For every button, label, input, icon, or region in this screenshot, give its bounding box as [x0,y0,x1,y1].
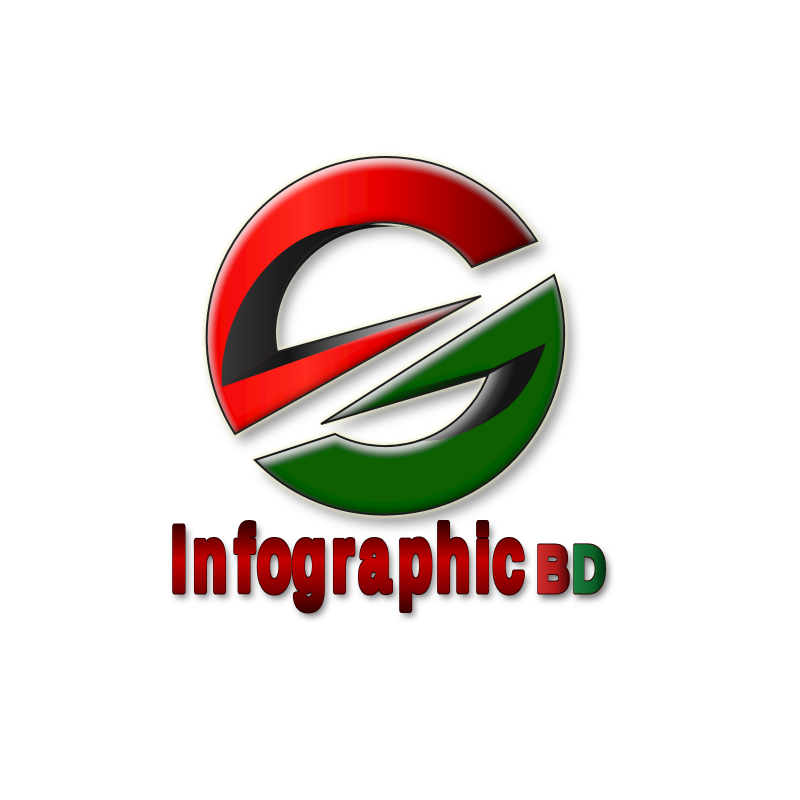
black crescent in red arc [222,224,430,387]
logo drop shadow [214,166,571,524]
green arc segment [255,275,564,515]
cream halo [207,157,564,515]
wordmark shadow: BD [539,539,609,610]
black crescent in green arc [420,343,546,441]
green outline [255,275,564,515]
wordmark shadow: Infographic [174,513,527,614]
grey sliver along the red blade [222,296,481,387]
title text: Infographic: Infographic [171,508,524,609]
red outline [207,157,537,434]
logo emblem [207,157,571,524]
title text: B: B [536,534,570,605]
red arc segment [207,157,537,434]
dark band above hole [370,343,546,410]
title text: D: D [572,534,606,605]
wordmark [171,508,609,614]
